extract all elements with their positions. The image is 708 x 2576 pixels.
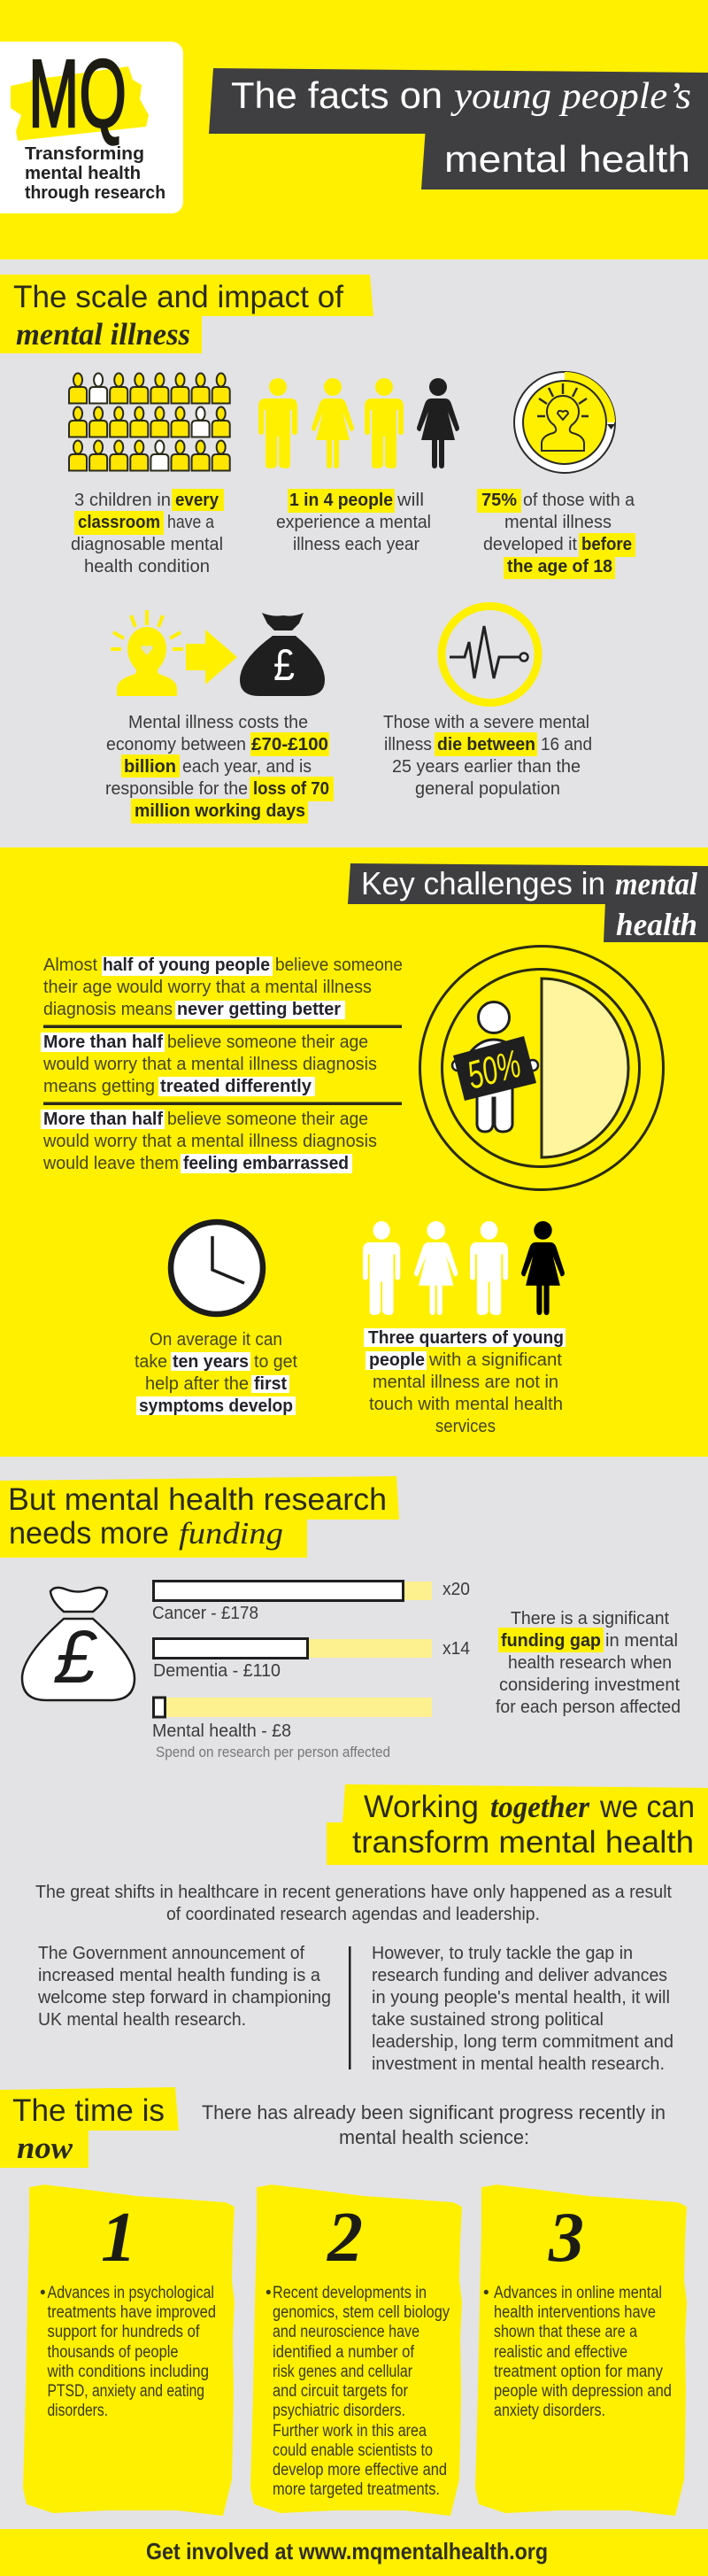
text: treated differently: believe someone their age <box>167 1033 368 1052</box>
heading: working together: together <box>490 1790 589 1824</box>
panel: progress 2: more targeted treatments. <box>273 2480 440 2499</box>
text: feeling embarrassed: would worry that a mental illness diagnosis <box>42 1132 377 1151</box>
text: ten years stat: to get <box>254 1352 297 1372</box>
text: economy cost stat <box>105 713 334 824</box>
text: ten years stat: symptoms develop <box>139 1396 293 1416</box>
panel: progress 3: Advances in online mental <box>494 2284 662 2302</box>
heading: key challenges in mental health: health <box>616 907 697 942</box>
footer: get involved: Get involved at www.mqmentalhealth.org <box>146 2538 548 2564</box>
text: severe illness stat: general population <box>415 779 560 799</box>
panel: progress 3: health interventions have <box>494 2303 656 2322</box>
text: ten years stat: help after the <box>145 1374 249 1394</box>
text: tackle the gap: research funding and deliver advances <box>372 1966 667 1985</box>
panel: progress 1 <box>23 2185 235 2516</box>
panel: progress 1: PTSD, anxiety and eating <box>48 2382 204 2401</box>
text: tackle the gap: in young people's mental health, it will <box>372 1988 670 2007</box>
heading: the scale and impact of mental illness <box>0 275 373 353</box>
bar chart: spend on research: Spend on research per person affected <box>156 1744 390 1760</box>
panel: progress 3: realistic and effective <box>494 2343 627 2362</box>
text: severe illness stat: die between <box>437 735 535 754</box>
text: ten years stat: first <box>254 1374 287 1394</box>
text: government announcement: UK mental health research. <box>38 2010 246 2030</box>
text: 1 in 4 people stat: 1 in 4 people <box>289 491 393 510</box>
heading: working together: transform mental health <box>352 1825 694 1860</box>
text: 1 in 4 people stat: illness each year <box>293 535 419 554</box>
text: every classroom stat: every <box>175 491 219 510</box>
text: tackle the gap <box>372 1944 673 2074</box>
panel: progress 2: and circuit targets for <box>273 2382 409 2401</box>
text: 75 percent stat: before <box>581 535 632 554</box>
panel: progress 2: Further work in this area <box>273 2422 427 2441</box>
text: significant progress: There has already been significant progress recently in <box>202 2101 666 2123</box>
text: feeling embarrassed <box>41 1110 377 1173</box>
text: treated differently: treated differently <box>160 1077 312 1096</box>
panel: research and progress background <box>0 1457 708 2529</box>
title: The facts on <box>231 74 442 116</box>
text: tackle the gap: take sustained strong political <box>372 2010 604 2030</box>
text: treated differently <box>41 1033 377 1096</box>
heading: working together <box>327 1784 708 1865</box>
text: severe illness stat: Those with a severe mental <box>383 713 589 732</box>
panel: progress 1: 1 <box>101 2199 136 2277</box>
logo: MQ: Transforming <box>25 144 144 164</box>
icon: classroom of children <box>69 374 230 471</box>
icon: yellow head with rays <box>111 610 183 696</box>
text: severe illness stat: 16 and <box>541 735 592 754</box>
text: every classroom stat <box>71 489 224 576</box>
panel: progress 1: with conditions including <box>47 2363 209 2381</box>
panel: progress 3: • <box>483 2284 489 2302</box>
icon: 75 percent ring with head <box>514 372 615 473</box>
text: economy cost stat: Mental illness costs the <box>128 713 308 732</box>
text: never getting better: believe someone <box>275 955 403 975</box>
panel: progress 3 <box>475 2185 687 2516</box>
text: three quarters stat: people <box>369 1350 425 1370</box>
heading: research needs more funding: needs more <box>9 1516 169 1551</box>
text: economy cost stat: responsible for the <box>105 779 248 799</box>
text: ten years stat: On average it can <box>150 1330 282 1350</box>
panel: progress 1: thousands of people <box>48 2343 179 2362</box>
text: economy cost stat: £70-£100 <box>251 735 328 754</box>
text: 75 percent stat: the age of 18 <box>507 557 612 576</box>
icon: heartbeat circle <box>442 606 538 703</box>
text: significant progress: mental health science: <box>339 2126 529 2148</box>
title: young people’s <box>450 76 691 117</box>
panel: progress 2 <box>250 2185 462 2516</box>
text: funding gap: considering investment <box>499 1675 680 1695</box>
heading: research needs more funding: But mental health research <box>8 1482 387 1517</box>
text: three quarters stat: touch with mental health <box>369 1395 563 1414</box>
panel: progress 2: • <box>266 2284 272 2302</box>
heading: research needs more funding: funding <box>179 1516 283 1551</box>
text: three quarters stat: mental illness are not in <box>373 1373 558 1392</box>
text: 75 percent stat: developed it <box>483 535 577 554</box>
panel: progress 3: treatment option for many <box>494 2363 663 2381</box>
bar chart: spend on research <box>152 1580 470 1760</box>
text: never getting better: Almost <box>43 955 97 975</box>
text: funding gap <box>496 1609 681 1717</box>
text: three quarters stat: with a significant <box>428 1350 562 1370</box>
title: mental health <box>444 138 690 180</box>
text: 75 percent stat: 75% <box>481 491 517 510</box>
panel: progress 2: genomics, stem cell biology <box>273 2303 450 2322</box>
heading: the time is now: now <box>17 2131 73 2165</box>
text: 1 in 4 people stat: will <box>396 491 424 510</box>
text: great shifts intro: The great shifts in healthcare in recent generations have only happened as a result <box>35 1883 672 1902</box>
text: 75 percent stat: mental illness <box>504 513 612 532</box>
panel: progress 3: anxiety disorders. <box>494 2402 605 2420</box>
bar chart: spend on research: Dementia - £110 <box>153 1661 281 1681</box>
bar chart: spend on research: x14 <box>442 1639 470 1659</box>
text: economy cost stat: each year, and is <box>182 757 312 777</box>
text: three quarters stat <box>364 1328 566 1436</box>
icon: outline money bag <box>22 1588 135 1700</box>
text: feeling embarrassed: believe someone their age <box>167 1110 368 1129</box>
text: 75 percent stat <box>477 489 635 579</box>
icon: 1 in 4 people figures <box>258 378 459 468</box>
text: funding gap: funding gap <box>501 1631 601 1651</box>
heading: key challenges in mental health <box>348 863 708 942</box>
logo: MQ: MQ <box>28 40 127 148</box>
panel: progress 2: risk genes and cellular <box>273 2363 413 2381</box>
icon: black money bag <box>240 613 325 696</box>
heading: working together: we can <box>599 1790 695 1824</box>
text: never getting better: half of young people <box>103 955 270 975</box>
heading: research needs more funding <box>0 1476 399 1558</box>
text: economy cost stat: economy between <box>106 735 246 754</box>
logo: MQ: mental health <box>25 164 141 183</box>
panel: progress 1: Advances in psychological <box>48 2284 214 2302</box>
panel: progress 2: develop more effective and <box>273 2461 447 2479</box>
text: never getting better: diagnosis means <box>43 1000 173 1019</box>
heading: key challenges in mental health: Key challenges in <box>361 865 605 901</box>
text: severe illness stat: illness <box>384 735 432 754</box>
arrow: cost <box>186 630 237 685</box>
panel: progress 1: support for hundreds of <box>48 2323 200 2341</box>
panel: progress 2: identified a number of <box>273 2343 415 2362</box>
icon: black money bag: £ <box>273 640 295 690</box>
text: feeling embarrassed: More than half <box>43 1110 163 1129</box>
text: funding gap: health research when <box>508 1653 672 1673</box>
text: every classroom stat: 3 children in <box>74 491 171 510</box>
text: ten years stat: ten years <box>173 1352 249 1372</box>
text: tackle the gap: leadership, long term commitment and <box>372 2032 673 2052</box>
text: treated differently: More than half <box>43 1033 163 1052</box>
text: great shifts intro: of coordinated research agendas and leadership. <box>166 1905 540 1924</box>
heading: the time is now <box>0 2087 179 2168</box>
text: never getting better <box>43 955 403 1019</box>
text: severe illness stat: 25 years earlier than the <box>392 757 581 777</box>
text: every classroom stat: diagnosable mental <box>71 535 223 554</box>
panel: progress 3: 3 <box>548 2199 584 2277</box>
bar chart: spend on research: x20 <box>442 1580 470 1599</box>
icon: three quarters figures <box>363 1221 565 1315</box>
panel: progress 2: 2 <box>327 2199 363 2277</box>
text: every classroom stat: classroom <box>78 513 160 532</box>
text: government announcement: increased mental health funding is a <box>38 1966 321 1985</box>
text: ten years stat <box>135 1330 297 1416</box>
text: funding gap: There is a significant <box>511 1609 669 1628</box>
text: economy cost stat: billion <box>124 757 176 777</box>
text: funding gap: for each person affected <box>496 1698 681 1717</box>
panel: progress 1: • <box>40 2284 46 2302</box>
text: treated differently: would worry that a mental illness diagnosis <box>42 1055 377 1074</box>
text: significant progress <box>202 2101 666 2148</box>
icon: outline money bag: £ <box>54 1615 98 1698</box>
panel: progress 1: disorders. <box>48 2402 108 2420</box>
text: government announcement: welcome step forward in championing <box>37 1988 331 2007</box>
panel: scale and impact background <box>0 259 708 847</box>
title <box>209 68 708 190</box>
heading: the time is now: The time is <box>12 2093 165 2128</box>
heading: working together: Working <box>364 1790 479 1824</box>
text: ten years stat: take <box>135 1352 167 1372</box>
text: feeling embarrassed: would leave them <box>42 1154 179 1173</box>
logo: MQ <box>0 40 183 213</box>
footer: get involved <box>0 2529 708 2576</box>
text: never getting better: their age would worry that a mental illness <box>43 978 372 997</box>
text: never getting better: never getting better <box>177 1000 341 1019</box>
label: 50 percent sign: 50% <box>463 1042 526 1098</box>
bar chart: spend on research: Cancer - £178 <box>152 1604 258 1623</box>
panel: progress 2: psychiatric disorders. <box>273 2402 405 2420</box>
icon: clock <box>171 1222 263 1314</box>
panel: progress 3: shown that these are a <box>494 2323 637 2341</box>
text: treated differently: means getting <box>43 1077 155 1096</box>
panel: progress 2: Recent developments in <box>273 2284 427 2302</box>
text: feeling embarrassed: feeling embarrassed <box>183 1154 349 1173</box>
logo: MQ: through research <box>25 183 165 203</box>
text: three quarters stat: Three quarters of young <box>368 1328 564 1348</box>
heading: the scale and impact of mental illness: mental illness <box>16 317 190 352</box>
text: government announcement <box>37 1944 331 2030</box>
heading: key challenges in mental health: mental <box>615 866 697 901</box>
panel: progress 3: people with depression and <box>494 2382 672 2401</box>
text: great shifts intro <box>35 1883 672 1924</box>
panel: key challenges background <box>0 847 708 1457</box>
panel: progress 1: treatments have improved <box>48 2303 216 2322</box>
text: government announcement: The Government announcement of <box>38 1944 304 1963</box>
text: funding gap: in mental <box>605 1631 678 1651</box>
text: tackle the gap: However, to truly tackle the gap in <box>372 1944 633 1963</box>
text: economy cost stat: million working days <box>135 801 305 821</box>
text: 1 in 4 people stat <box>276 489 431 554</box>
text: 75 percent stat: of those with a <box>523 491 635 510</box>
text: severe illness stat <box>383 713 592 799</box>
panel: progress 2: and neuroscience have <box>273 2323 419 2341</box>
text: three quarters stat: services <box>435 1417 496 1436</box>
text: 1 in 4 people stat: experience a mental <box>276 513 431 532</box>
text: every classroom stat: have a <box>167 513 215 532</box>
panel: progress 2: could enable scientists to <box>273 2441 433 2460</box>
bar chart: spend on research: Mental health - £8 <box>152 1721 291 1741</box>
text: tackle the gap: investment in mental health research. <box>372 2054 665 2074</box>
heading: the scale and impact of mental illness: The scale and impact of <box>13 280 343 314</box>
text: economy cost stat: loss of 70 <box>253 779 329 799</box>
panel: header background <box>0 0 708 259</box>
text: every classroom stat: health condition <box>84 557 210 576</box>
icon: 50 percent person and half circle <box>419 946 664 1190</box>
